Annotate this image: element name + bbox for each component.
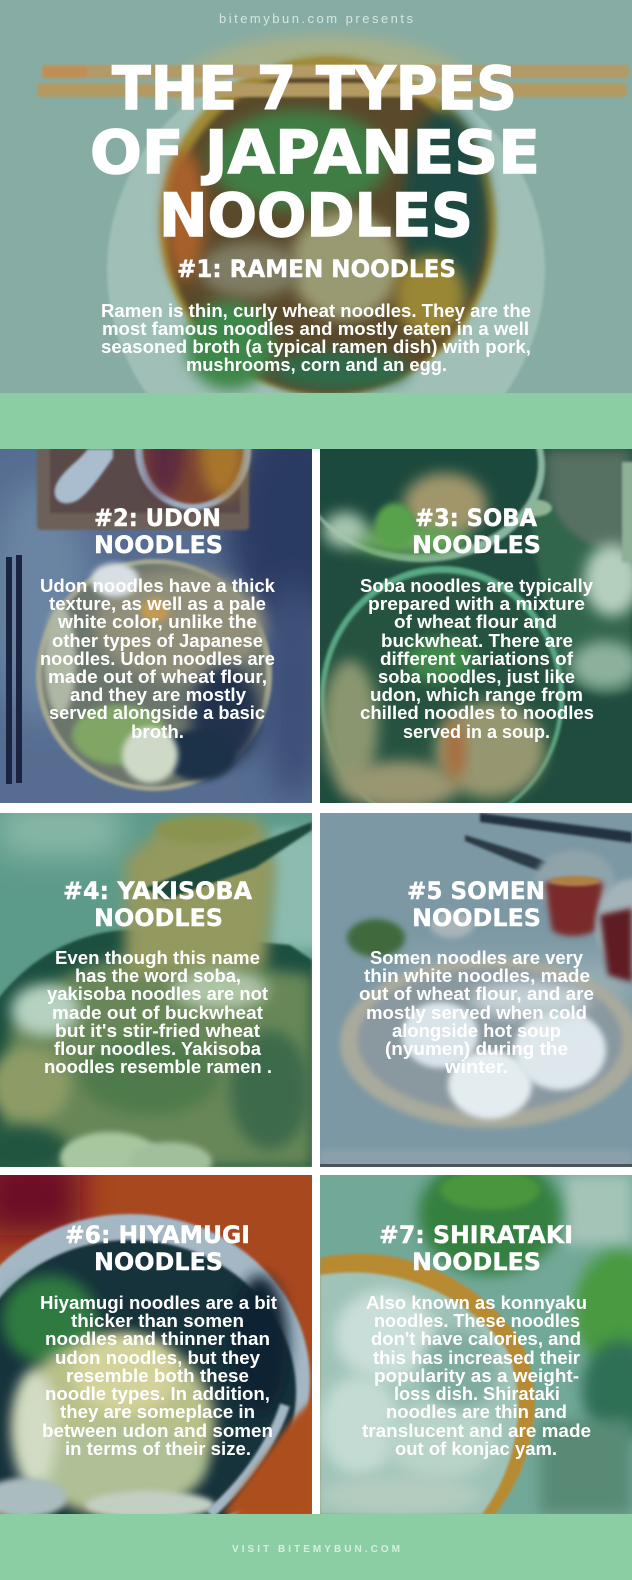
text: ramen description: seasoned broth (a typical ramen dish) with pork,	[101, 337, 531, 357]
text: yakisoba description: made out of buckwheat	[52, 1003, 263, 1023]
heading: udon: NOODLES	[94, 531, 223, 559]
photo: shirataki bowl	[320, 1155, 632, 1515]
heading: hiyamugi: #6: HIYAMUGI	[65, 1221, 250, 1249]
text: hiyamugi description: noodles and thinner than	[45, 1329, 270, 1349]
title: OF JAPANESE	[90, 118, 540, 188]
text: soba description: soba noodles, just like	[378, 667, 575, 687]
heading: hiyamugi	[65, 1221, 250, 1276]
text: yakisoba description: yakisoba noodles are not	[47, 984, 268, 1004]
text: ramen description: Ramen is thin, curly wheat noodles. They are the	[101, 301, 531, 321]
heading: shirataki: NOODLES	[412, 1248, 541, 1276]
text: hiyamugi description: Hiyamugi noodles are a bit	[40, 1293, 277, 1313]
text: hiyamugi description: in terms of their size.	[65, 1439, 251, 1459]
text: shirataki description: noodles. These noodles	[374, 1311, 580, 1331]
text: somen description: winter.	[444, 1057, 508, 1077]
text: hiyamugi description: they are someplace in	[60, 1402, 255, 1422]
chopsticks	[37, 65, 629, 97]
text: somen description: mostly served when cold	[366, 1003, 587, 1023]
text: yakisoba description: Even though this name	[55, 948, 260, 968]
text: ramen description: mushrooms, corn and an egg.	[186, 355, 447, 375]
heading: soba: #3: SOBA	[415, 504, 537, 532]
text: hiyamugi description: udon noodles, but they	[55, 1348, 260, 1368]
text: udon description	[40, 576, 276, 742]
text: shirataki description: loss dish. Shirataki	[394, 1384, 560, 1404]
text: udon description: Udon noodles have a thick	[40, 576, 276, 596]
text: somen description: alongside hot soup	[392, 1021, 561, 1041]
text: soba description: of wheat flour and	[394, 612, 557, 632]
green band	[0, 393, 632, 449]
title: THE 7 TYPES	[112, 54, 517, 124]
text: somen description: Somen noodles are very	[370, 948, 583, 968]
heading: ramen: #1: RAMEN NOODLES	[177, 255, 456, 283]
title: NOODLES	[159, 181, 473, 251]
heading: shirataki	[379, 1221, 573, 1276]
text: shirataki description: popularity as a weight-	[374, 1366, 579, 1386]
heading: somen: NOODLES	[412, 904, 541, 932]
heading: somen: #5 SOMEN	[407, 877, 545, 905]
text: shirataki description	[362, 1293, 591, 1459]
heading: soba: NOODLES	[412, 531, 541, 559]
text: somen description	[359, 948, 594, 1077]
heading: yakisoba	[63, 877, 252, 932]
text: shirataki description: don't have calories, and	[371, 1329, 581, 1349]
text: yakisoba description: but it's stir-fried wheat	[55, 1021, 260, 1041]
text: soba description: served in a soup.	[403, 722, 550, 742]
text: udon description: broth.	[131, 722, 184, 742]
title	[90, 54, 540, 251]
photo: soba bowls	[320, 449, 632, 803]
text: soba description: udon, which range from	[370, 685, 583, 705]
photo: hiyamugi bowl	[0, 1175, 312, 1514]
text: udon description: other types of Japanese	[52, 631, 263, 651]
text: udon description: and they are mostly	[70, 685, 246, 705]
photo: udon bowl	[0, 449, 312, 803]
panel: udon	[0, 449, 312, 803]
text: hiyamugi description: between udon and somen	[42, 1421, 273, 1441]
text: shirataki description: out of konjac yam.	[395, 1439, 557, 1459]
text: soba description: chilled noodles to noodles	[360, 703, 594, 723]
text: hiyamugi description: resemble both these	[66, 1366, 249, 1386]
panel: hiyamugi	[0, 1175, 312, 1514]
chopsticks	[6, 557, 12, 784]
heading: yakisoba: NOODLES	[94, 904, 223, 932]
text: soba description	[360, 576, 594, 742]
text: soba description: buckwheat. There are	[381, 631, 573, 651]
text: shirataki description: this has increased their	[373, 1348, 580, 1368]
text: yakisoba description: noodles resemble ramen .	[44, 1057, 272, 1077]
heading: hiyamugi: NOODLES	[94, 1248, 223, 1276]
panel: somen	[320, 813, 632, 1167]
photo: somen basket	[320, 813, 632, 1167]
text: hiyamugi description: noodle types. In addition,	[45, 1384, 270, 1404]
photo: yakisoba noodles	[0, 813, 312, 1167]
heading: yakisoba: #4: YAKISOBA	[63, 877, 252, 905]
text: somen description: out of wheat flour, and are	[359, 984, 594, 1004]
text: hiyamugi description: thicker than somen	[71, 1311, 244, 1331]
heading: udon	[94, 504, 223, 559]
text: udon description: served alongside a basic	[49, 703, 265, 723]
text: udon description: noodles. Udon noodles are	[40, 649, 275, 669]
heading: udon: #2: UDON	[94, 504, 221, 532]
panel: ramen header	[0, 0, 632, 393]
text: yakisoba description: flour noodles. Yakisoba	[54, 1039, 262, 1059]
text: shirataki description: Also known as konnyaku	[366, 1293, 587, 1313]
text: ramen description	[101, 301, 531, 375]
panel: soba	[320, 449, 632, 803]
heading: shirataki: #7: SHIRATAKI	[379, 1221, 573, 1249]
text: somen description: (nyumen) during the	[385, 1039, 568, 1059]
text: udon description: made out of wheat flour,	[48, 667, 267, 687]
photo: ramen bowl	[0, 0, 632, 393]
text: yakisoba description	[44, 948, 272, 1077]
text: udon description: white color, unlike the	[57, 612, 257, 632]
heading: soba	[412, 504, 541, 559]
panel: shirataki	[320, 1155, 632, 1515]
brand line: bitemybun.com presents	[219, 11, 414, 26]
text: udon description: texture, as well as a pale	[49, 594, 266, 614]
text: soba description: Soba noodles are typically	[360, 576, 593, 596]
text: soba description: prepared with a mixture	[368, 594, 585, 614]
heading: somen	[407, 877, 545, 932]
text: yakisoba description: has the word soba,	[75, 966, 241, 986]
text: ramen description: most famous noodles and mostly eaten in a well	[102, 319, 529, 339]
text: shirataki description: translucent and are made	[362, 1421, 591, 1441]
text: somen description: thin white noodles, made	[364, 966, 590, 986]
text: shirataki description: noodles are thin and	[386, 1402, 567, 1422]
footer link text: VISIT BITEMYBUN.COM	[232, 1544, 400, 1555]
text: hiyamugi description	[40, 1293, 277, 1459]
panel: yakisoba	[0, 813, 312, 1167]
text: soba description: different variations of	[380, 649, 574, 669]
footer	[0, 1514, 632, 1580]
